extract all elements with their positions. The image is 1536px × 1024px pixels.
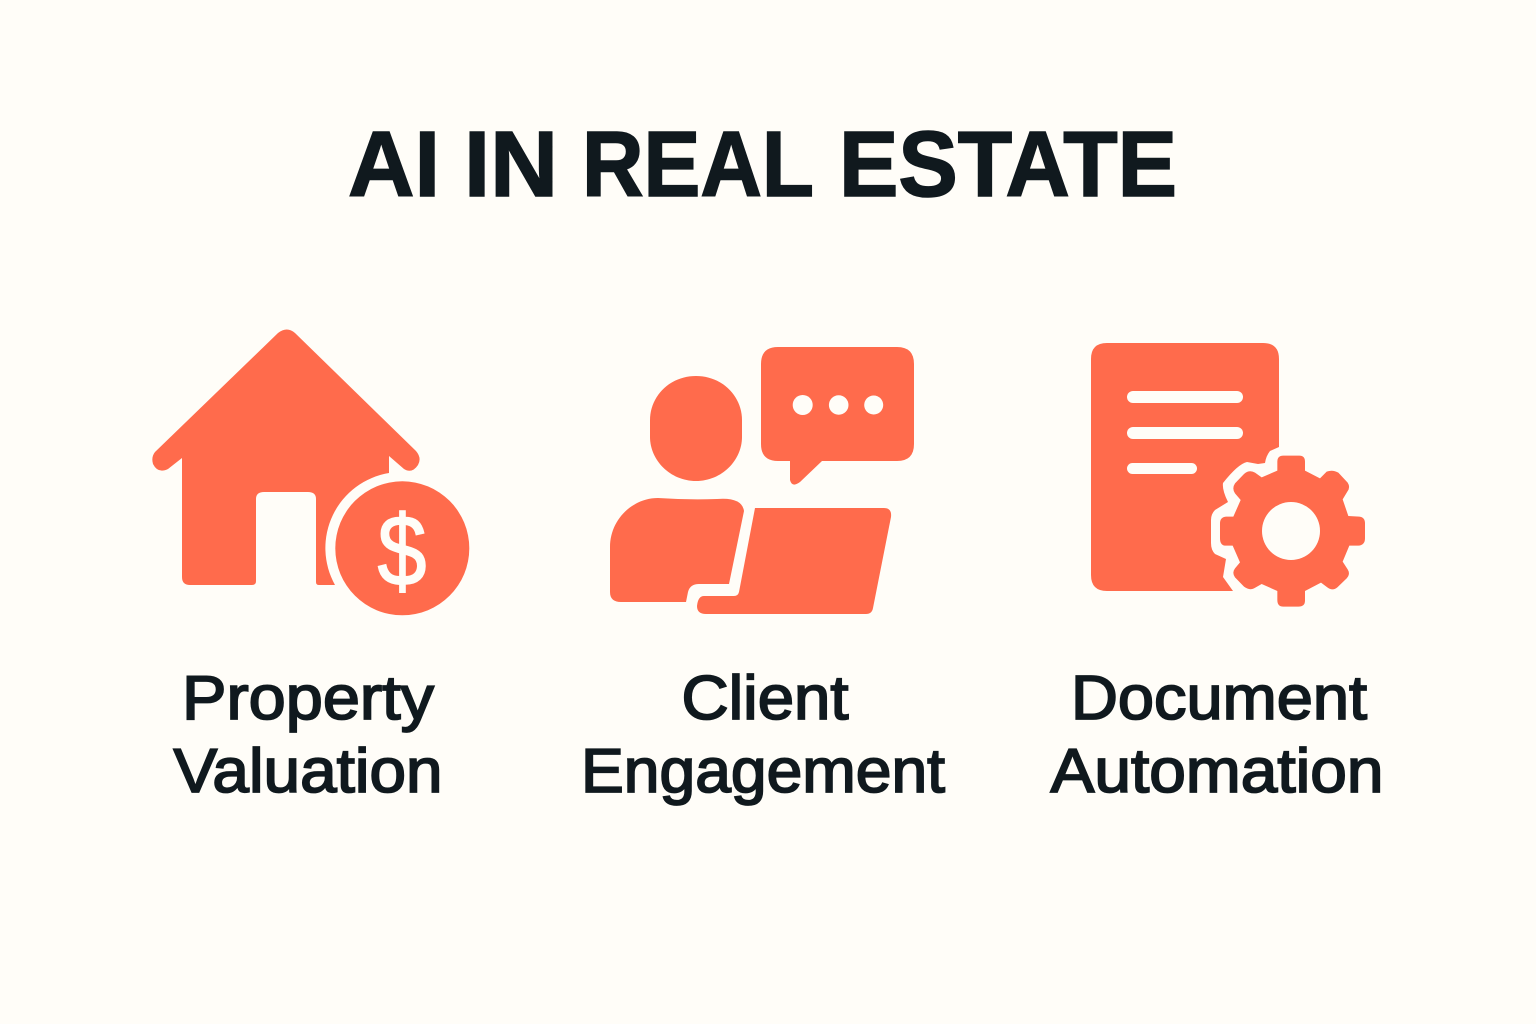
panel: document automation	[1050, 343, 1384, 806]
title: REAL	[582, 112, 814, 216]
label: document automation	[1050, 664, 1384, 806]
title: AI	[348, 112, 440, 216]
panel: client engagement	[581, 347, 945, 806]
label: document automation: Document	[1071, 664, 1367, 733]
panel: property valuation	[152, 330, 469, 806]
title	[348, 112, 1177, 216]
label: client engagement	[581, 664, 945, 806]
label: document automation: Automation	[1050, 737, 1384, 806]
label: property valuation: Valuation	[174, 737, 442, 806]
icon: house with dollar coin: $	[378, 495, 426, 607]
icon: document with gear	[1091, 343, 1365, 607]
label: property valuation	[174, 664, 442, 806]
icon: house with dollar coin	[152, 330, 469, 615]
title: ESTATE	[839, 112, 1177, 216]
label: client engagement: Client	[682, 664, 848, 733]
label: property valuation: Property	[182, 664, 434, 733]
label: client engagement: Engagement	[581, 737, 945, 806]
title: IN	[464, 112, 558, 216]
icon: person with laptop and speech bubble	[610, 347, 914, 614]
